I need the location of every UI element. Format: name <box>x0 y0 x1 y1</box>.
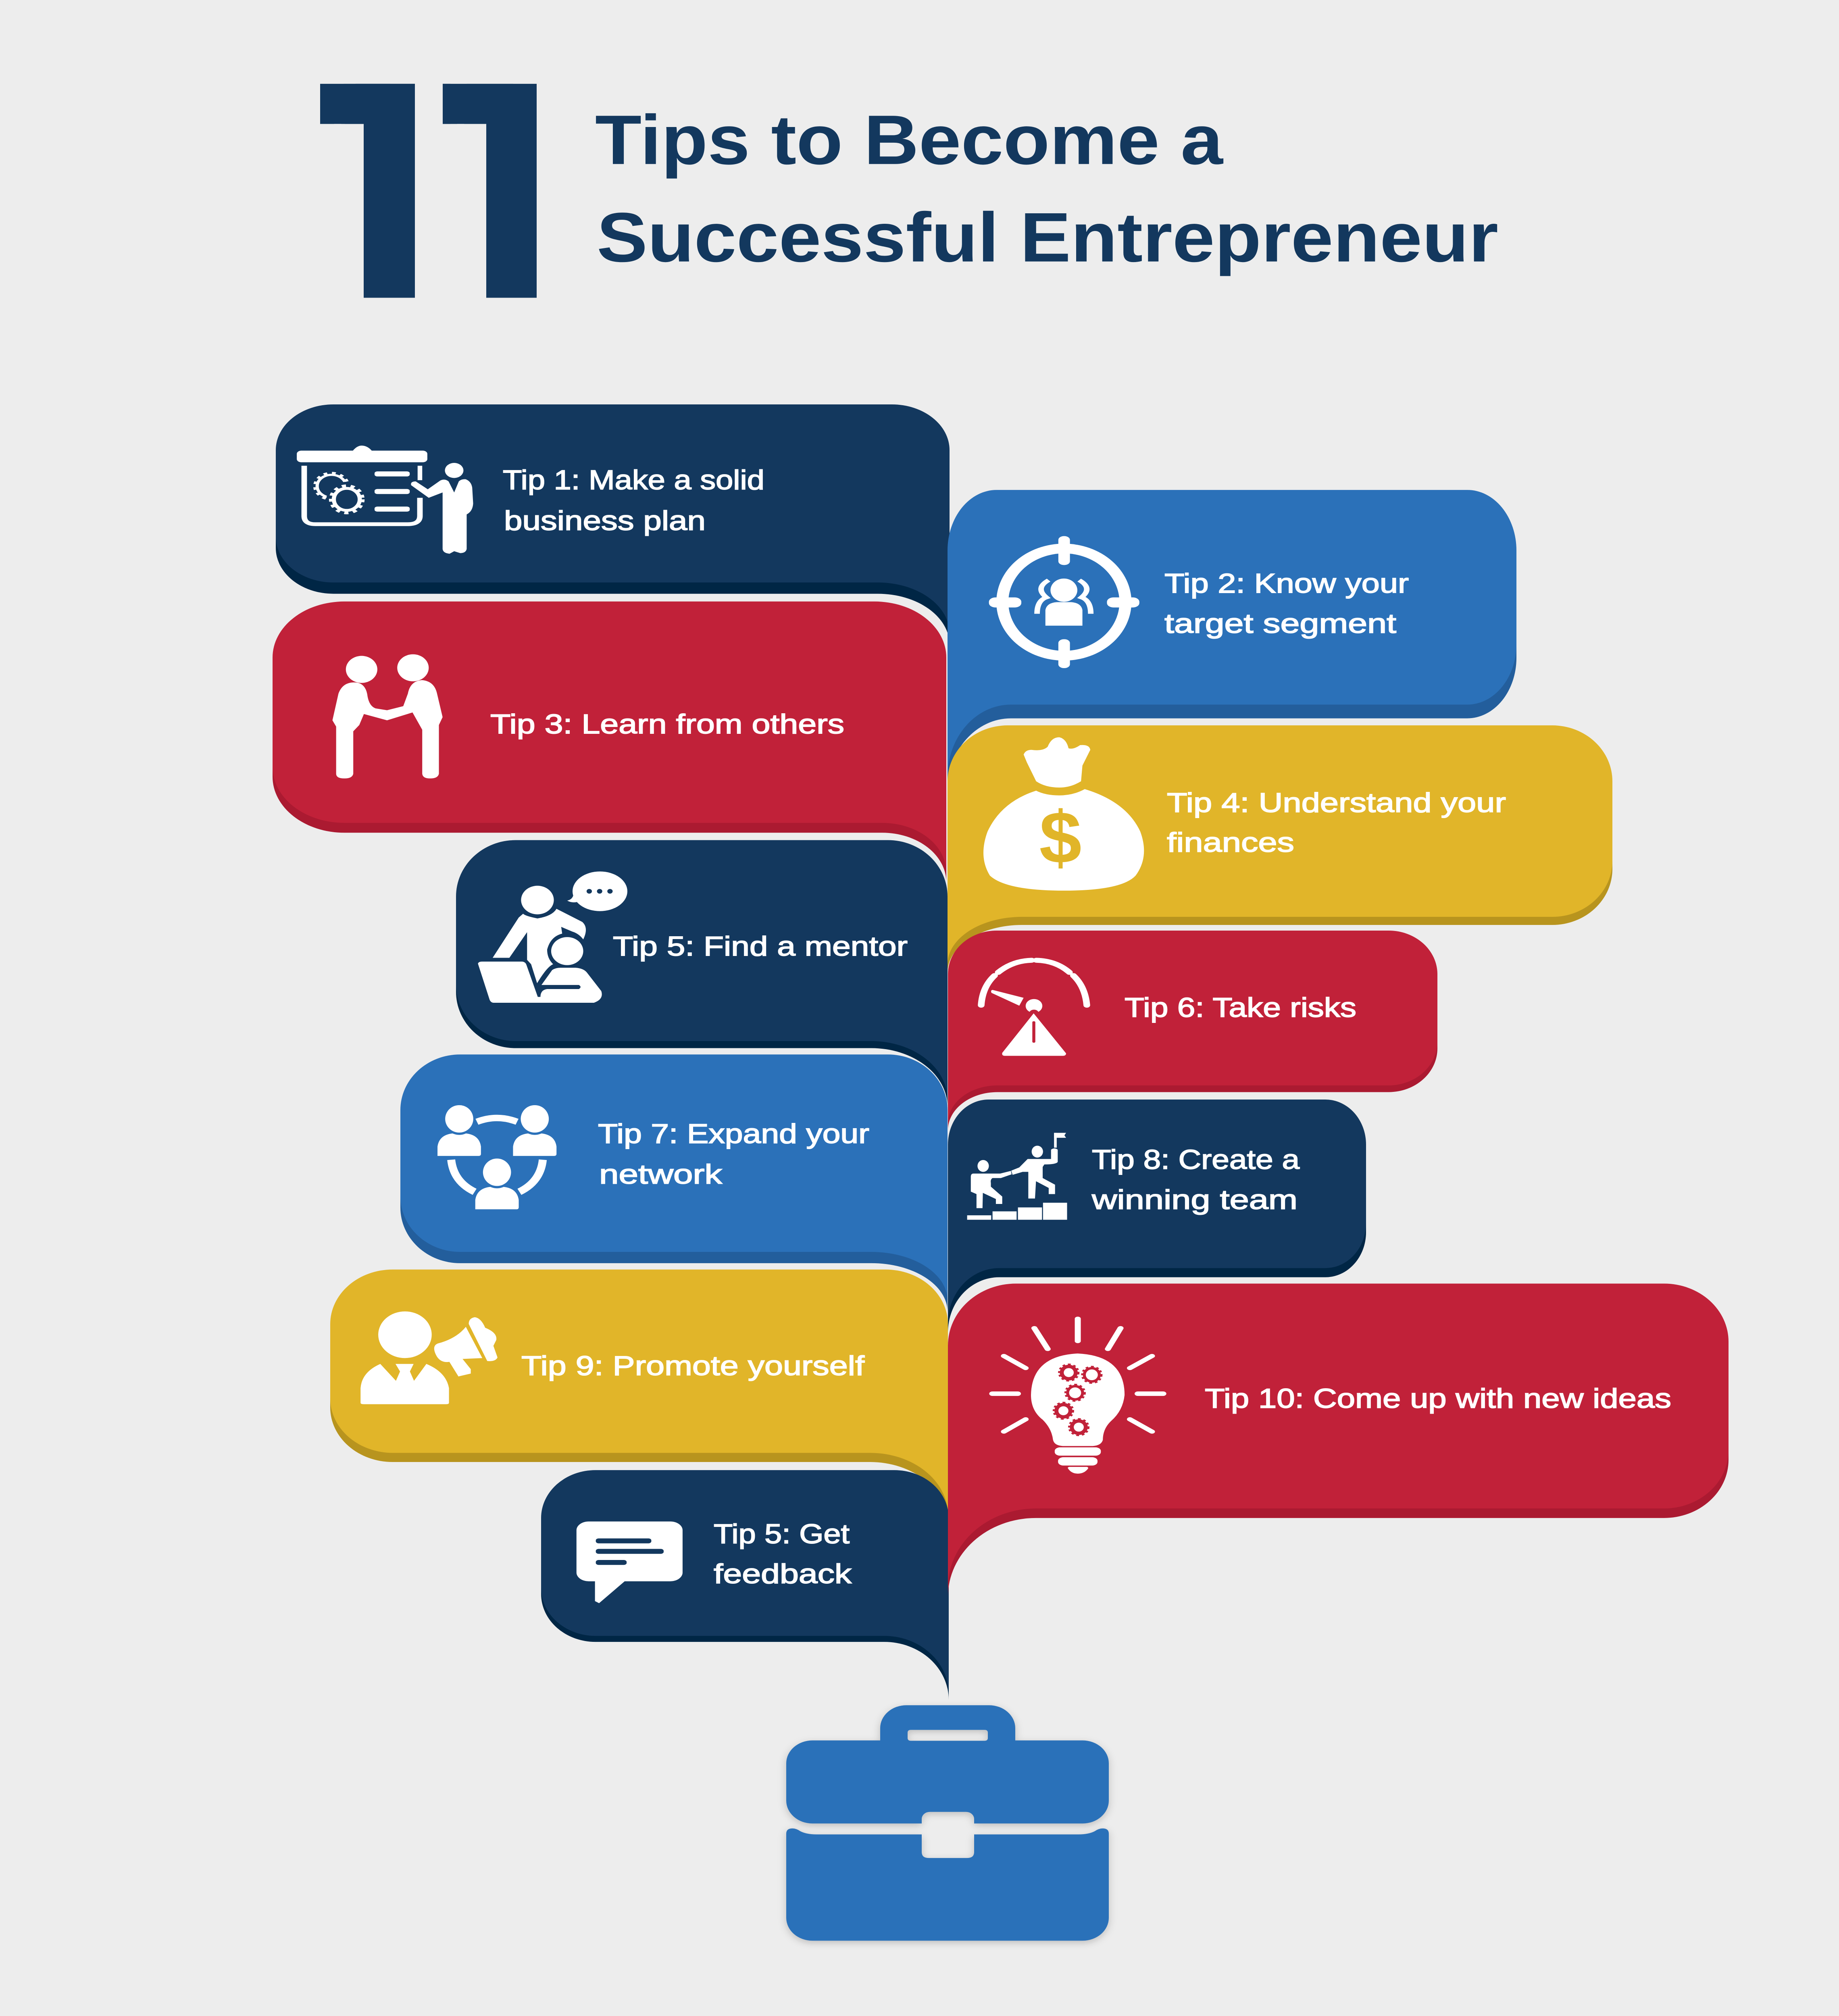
text: tip 2: Tip 2: Know your <box>1164 568 1409 599</box>
icon: light bulb with gears <box>993 1319 1163 1474</box>
text: tip 5 get feedback: feedback <box>714 1558 852 1589</box>
panel: tip 5 find a mentor <box>456 840 948 1107</box>
text: tip 5 get feedback <box>714 1518 852 1589</box>
icon: presenter with board <box>297 446 473 554</box>
title number: 11: 1 <box>258 16 456 364</box>
icon: risk gauge with warning triangle <box>981 960 1087 1056</box>
text: tip 1: Tip 1: Make a solid <box>503 464 764 495</box>
icon: mentor and mentee at laptop <box>478 871 627 1003</box>
panel: tip 1 <box>276 404 950 645</box>
icon: handshake <box>332 654 443 779</box>
icon: network of people <box>437 1105 556 1209</box>
title number: 11 <box>320 84 537 298</box>
text: tip 5 get feedback: Tip 5: Get <box>714 1518 850 1549</box>
text: tip 6: Tip 6: Take risks <box>1125 992 1356 1023</box>
text: tip 8: Tip 8: Create a <box>1092 1144 1300 1175</box>
icon: money bag <box>983 737 1144 891</box>
text: tip 7: Tip 7: Expand your <box>598 1118 869 1149</box>
icon: team climbing steps with flag <box>967 1133 1067 1220</box>
panel: tip 10 <box>948 1283 1729 1597</box>
text: tip 5 find a mentor: Tip 5: Find a mentor <box>613 931 908 962</box>
title text: Tips to Become a <box>595 101 1224 179</box>
title text <box>595 101 1498 277</box>
icon: briefcase <box>786 1705 1109 1941</box>
panel: tip 6 <box>948 931 1437 1130</box>
text: tip 8 <box>1091 1144 1300 1215</box>
text: tip 7: network <box>599 1159 722 1189</box>
panel: tip 9 <box>330 1270 948 1524</box>
text: tip 2: target segment <box>1164 608 1396 639</box>
text: tip 4 <box>1167 787 1506 858</box>
panel: tip 2 <box>948 490 1516 791</box>
text: tip 9: Tip 9: Promote yourself <box>521 1350 865 1381</box>
text: tip 3: Tip 3: Learn from others <box>490 709 844 739</box>
icon: speech bubble <box>577 1521 683 1603</box>
text: tip 1 <box>503 464 764 536</box>
text: tip 4: Tip 4: Understand your <box>1167 787 1506 818</box>
text: tip 4: finances <box>1167 827 1294 858</box>
text: tip 2 <box>1164 568 1409 639</box>
panel: tip 8 <box>948 1100 1366 1333</box>
icon: target with people <box>989 536 1139 668</box>
icon: money bag: $ <box>1039 796 1082 879</box>
panel: tip 5 get feedback <box>541 1470 949 1700</box>
text: tip 1: business plan <box>504 505 706 536</box>
title text: Successful Entrepreneur <box>597 198 1498 277</box>
icon: person with megaphone <box>360 1311 498 1404</box>
panel: tip 3 <box>273 602 946 882</box>
text: tip 7 <box>598 1118 869 1189</box>
panel: tip 7 <box>400 1054 948 1312</box>
text: tip 8: winning team <box>1091 1184 1298 1215</box>
panel: tip 4 <box>948 725 1612 973</box>
title number: 11: 1 <box>381 16 579 364</box>
text: tip 10: Tip 10: Come up with new ideas <box>1205 1383 1671 1414</box>
